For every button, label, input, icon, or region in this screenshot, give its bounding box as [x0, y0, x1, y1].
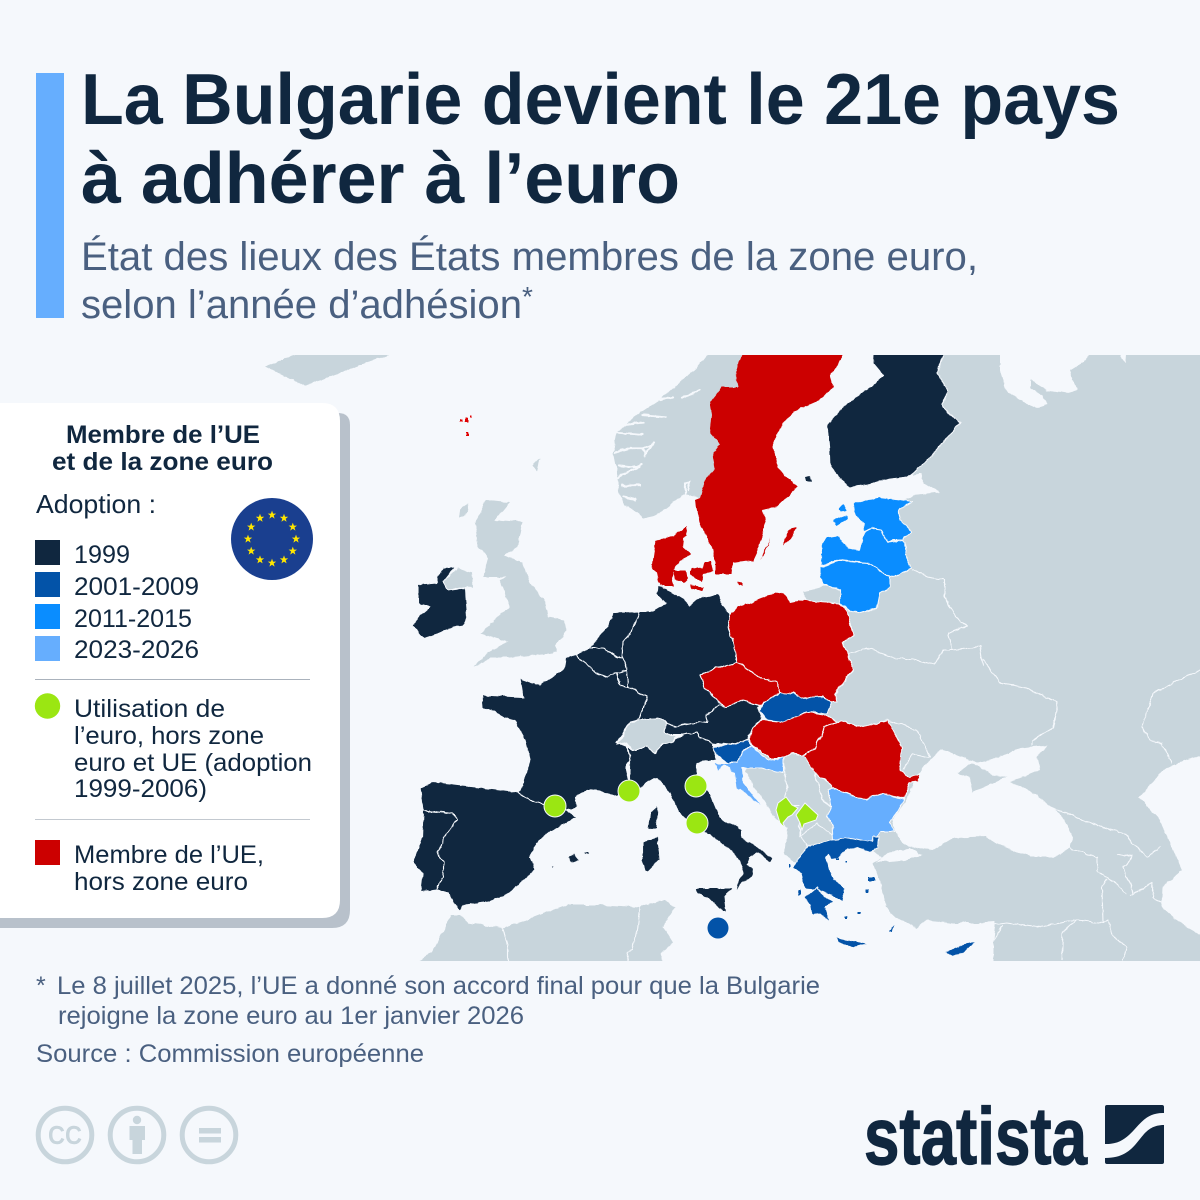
island: Mallorca [567, 854, 580, 863]
legend heading: et de la zone euro [52, 448, 273, 476]
legend heading: Membre de l’UE [66, 421, 260, 449]
title: La Bulgarie devient le 21e pays [81, 60, 1120, 140]
sea: White Sea [1000, 355, 1088, 408]
land: Northern Ireland [443, 568, 473, 590]
micro-state marker: Andorra [544, 795, 566, 817]
land: Shetland [533, 458, 540, 472]
subtitle: État des lieux des États membres de la zone euro, [81, 234, 978, 279]
statista logo mark [1105, 1105, 1164, 1164]
country: Italy [627, 732, 773, 892]
legend item: EU member outside euro zone: Membre de l’UE, [74, 841, 264, 869]
island: Öland [760, 538, 770, 560]
land: Crimea [958, 763, 1007, 792]
subtitle: * [522, 281, 533, 312]
country: Spain [420, 782, 578, 912]
micro-state marker: San Marino [685, 775, 707, 797]
legend item: 2011-2015: 2011-2015 [74, 605, 192, 633]
island: Menorca [584, 852, 590, 855]
footnote: rejoigne la zone euro au 1er janvier 2026 [58, 1002, 524, 1030]
subtitle [81, 234, 978, 327]
sea: Marmara [877, 848, 922, 862]
island: Saaremaa [833, 515, 848, 525]
subtitle: selon l’année d’adhésion [81, 283, 522, 327]
footnote: Le 8 juillet 2025, l’UE a donné son accord final pour que la Bulgarie [57, 972, 820, 1000]
land: Norway [613, 345, 745, 518]
non-EU border lines [503, 570, 1200, 961]
country: Croatia [714, 745, 783, 817]
country: Ireland [412, 567, 467, 638]
legend item: euro use outside euro zone: 1999-2006) [74, 775, 207, 803]
country: Slovenia [713, 739, 752, 763]
country: Switzerland [617, 718, 677, 753]
legend item: euro use outside euro zone: l’euro, hors zone [74, 722, 264, 750]
sea: Black Sea [893, 745, 1073, 857]
country: Sweden [695, 345, 850, 575]
icon: attribution [110, 1108, 164, 1162]
icon: creative commons: CC [48, 1120, 82, 1150]
island: Hiiumaa [838, 505, 847, 512]
country: Austria [660, 700, 762, 745]
legend item: EU member outside euro zone [35, 840, 264, 896]
island: Crete [835, 937, 869, 948]
island: Gotland [783, 528, 797, 547]
legend shadow [0, 413, 350, 928]
icon: creative commons [38, 1108, 92, 1162]
country: Romania [803, 720, 920, 799]
island: Zealand [691, 561, 713, 581]
land: eastern Europe, Russia, Turkey and the Balkans [745, 345, 1200, 975]
micro-state marker: Malta [708, 918, 728, 938]
fjords [615, 390, 700, 500]
country: Montenegro [776, 797, 798, 828]
micro-state marker: Monaco [618, 780, 640, 802]
legend item: euro use outside euro zone: Utilisation de [74, 695, 225, 723]
country: Portugal [413, 810, 457, 892]
islands: Faroe [460, 416, 472, 437]
land: Hebrides [459, 504, 469, 518]
country: Finland [805, 345, 960, 487]
title accent bar [36, 73, 64, 318]
island: Åland [805, 476, 811, 482]
islands: Aegean [789, 858, 875, 919]
country: Hungary [749, 712, 837, 758]
island: Sardinia [642, 837, 660, 872]
footnote: * [36, 972, 46, 1000]
island: Ibiza [550, 866, 554, 869]
map land layer [265, 345, 1200, 975]
land: United Kingdom [473, 500, 567, 667]
sea: Barents inlet [1120, 355, 1126, 363]
country: Belgium [577, 648, 627, 677]
source: Source : Commission européenne [36, 1040, 424, 1068]
country: Czechia [700, 663, 780, 707]
legend item: 1999: 1999 [74, 541, 130, 569]
statista wordmark: statista [864, 1092, 1088, 1182]
legend item: 1999 [35, 540, 130, 569]
island: Corsica [648, 805, 658, 830]
region: Peloponnese [805, 888, 834, 922]
country: Denmark [652, 527, 742, 591]
country: Bulgaria [827, 788, 904, 843]
island: Cyprus [947, 942, 975, 956]
sea: Caspian Sea [1138, 752, 1200, 940]
adoption label: Adoption : [36, 489, 156, 519]
title: à adhérer à l’euro [81, 139, 680, 219]
legend card [0, 403, 340, 918]
legend heading [52, 421, 273, 476]
footnote [36, 972, 820, 1030]
country: Luxembourg [617, 670, 628, 687]
country: Slovakia [759, 692, 832, 722]
legend item: euro use outside euro zone: euro et UE (adoption [74, 749, 312, 777]
country: Estonia [853, 497, 913, 542]
legend panel [0, 403, 350, 928]
map of Europe [265, 345, 1200, 975]
legend item: euro use outside euro zone [35, 693, 312, 803]
legend item: 2001-2009: 2001-2009 [74, 573, 199, 601]
land: Iceland [265, 345, 412, 386]
legend item: 2023-2026: 2023-2026 [74, 636, 199, 664]
country: Netherlands [588, 612, 639, 658]
icon: no derivatives [182, 1108, 236, 1162]
country: Poland [728, 592, 853, 703]
country: Germany [622, 585, 737, 727]
countries: central and eastern EU [700, 497, 975, 956]
country: Kosovo [796, 803, 818, 830]
island: Funen [674, 571, 688, 583]
island: Rhodes [889, 925, 895, 932]
legend item: EU member outside euro zone: hors zone euro [74, 868, 248, 896]
island: Sicily [695, 888, 733, 912]
country: Latvia [820, 528, 911, 577]
island: Bornholm [737, 581, 742, 585]
island: Lolland [690, 585, 704, 591]
title [81, 60, 1120, 219]
country: Lithuania [820, 561, 890, 613]
country: France [482, 655, 648, 810]
land: North Africa [420, 900, 676, 961]
micro-state marker: Vatican [686, 812, 708, 834]
countries: euro zone west [412, 567, 773, 912]
icon: EU flag [231, 498, 313, 580]
country: Greece [793, 836, 879, 902]
